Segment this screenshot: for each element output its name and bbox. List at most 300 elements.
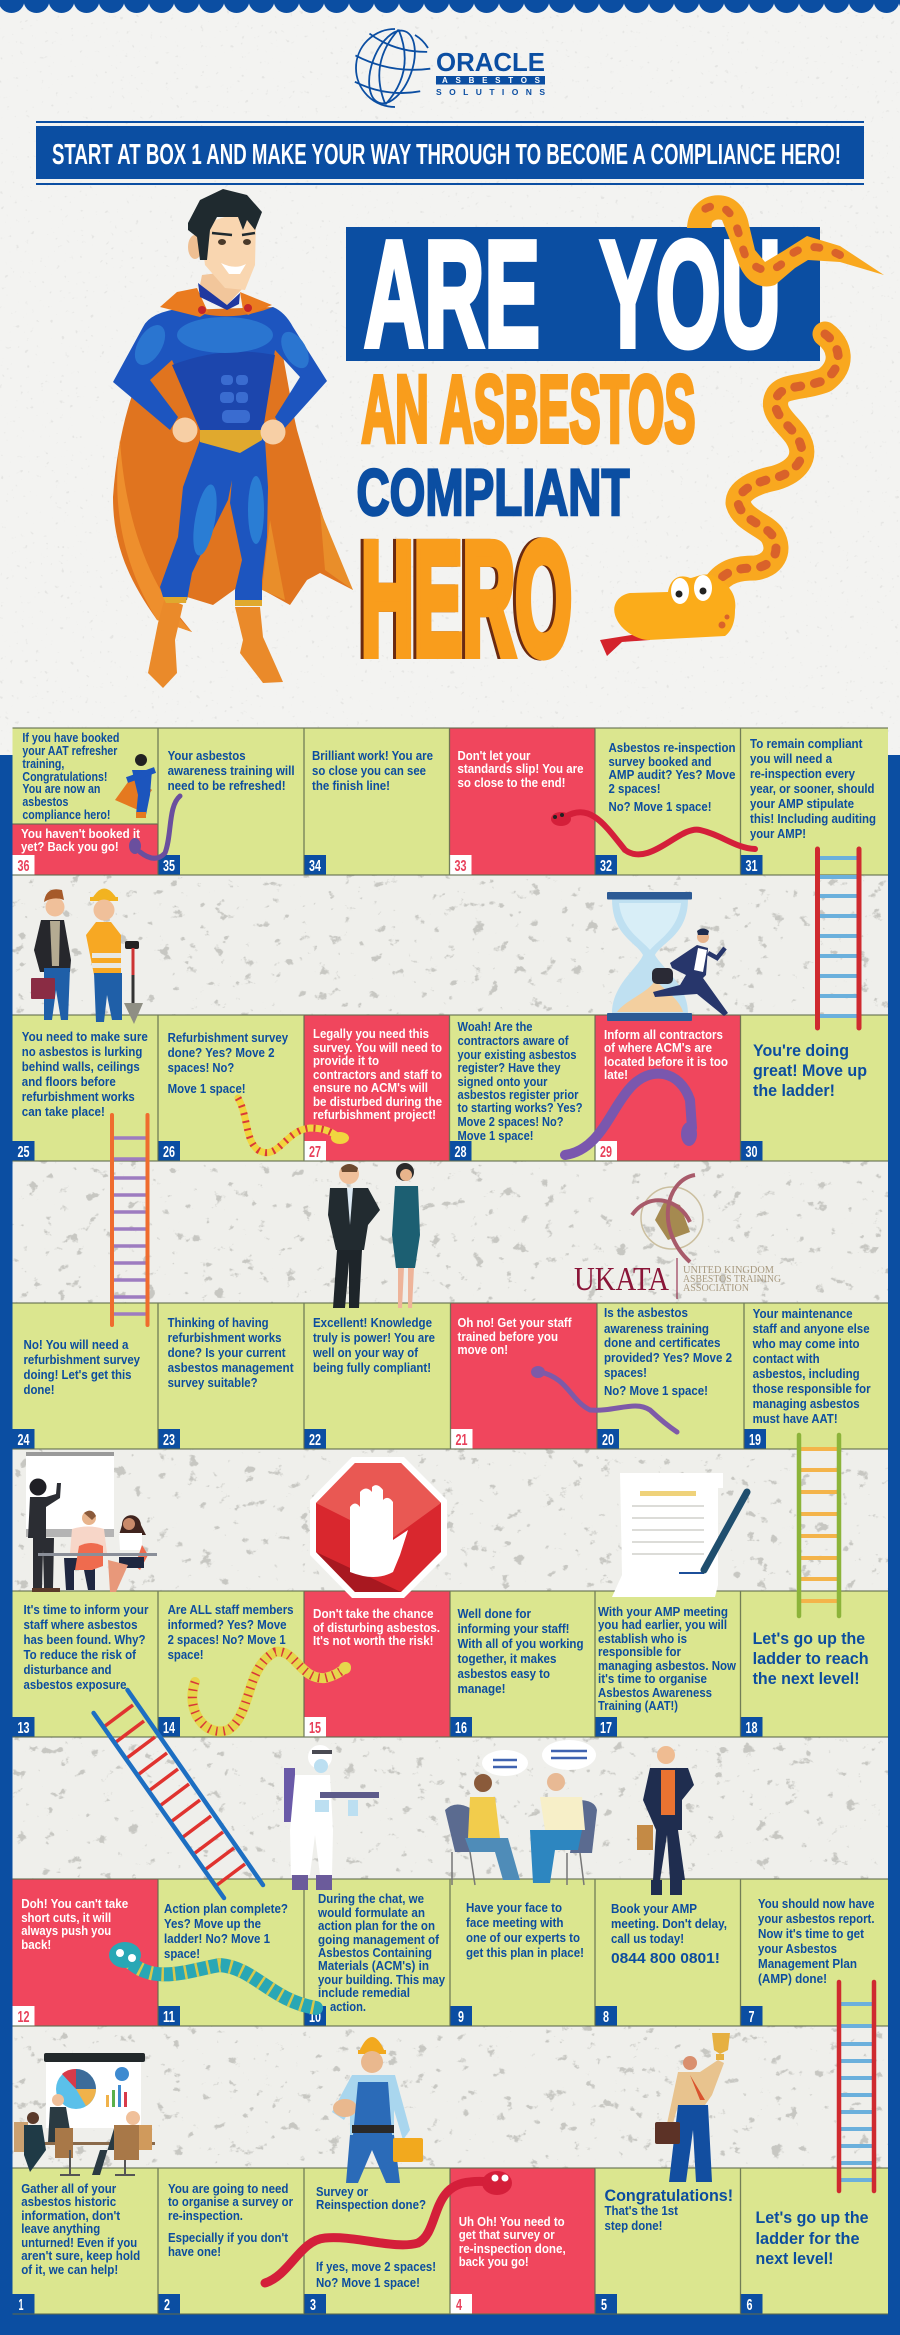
square 11 [158,1879,304,2026]
title: COMPLIANT [356,455,630,529]
grid lines [12,728,888,2314]
square 36: You are now an [22,781,100,796]
square 14: informed? Yes? Move [168,1617,287,1632]
square 14: 2 spaces! No? Move 1 [168,1632,286,1647]
square 6: next level! [756,2249,834,2268]
square 20: provided? Yes? Move 2 [604,1350,732,1365]
square 4: 4 [456,2297,462,2314]
square 36: If you have booked [22,730,119,745]
square 30: the ladder! [753,1081,835,1100]
square 23: survey suitable? [168,1375,258,1390]
square 25 [12,1015,158,1161]
square 2: You are going to need [168,2181,289,2196]
square 35: Your asbestos [168,748,246,763]
square 31: To remain compliant [750,736,863,751]
square 29: 29 [600,1144,612,1161]
snake: red square 33 [551,812,755,854]
icon: globe [348,23,436,111]
square 31: this! Including auditing [750,811,876,826]
square 13: has been found. Why? [24,1632,146,1647]
square 3: Survey or [316,2184,368,2199]
square 34 [304,728,450,875]
square 20: done and certificates [604,1335,720,1350]
logo: UKATA [574,1175,781,1299]
square 11: Action plan complete? [164,1901,288,1916]
icon: orange snake [600,195,884,656]
snake: yellow square 27 [238,1098,349,1153]
square 9: 9 [458,2009,464,2026]
square 30: 30 [746,1144,758,1161]
square 7: 7 [748,2009,755,2026]
square 8 [595,1879,740,2026]
square 20: No? Move 1 space! [604,1383,708,1398]
square 17: With your AMP meeting [598,1604,728,1619]
icon: small hero in square 36 [115,754,155,818]
snake: yellow square 15 [192,1652,351,1731]
square 13: To reduce the risk of [24,1647,137,1662]
man seated [530,1773,597,1885]
square 18: Let's go up the [753,1629,865,1648]
square 19: Your maintenance [753,1306,853,1321]
square 12: Doh! You can't take [21,1896,128,1911]
square 29 [595,1015,740,1161]
square 27: Legally you need this [313,1026,429,1041]
square 10: include remedial [318,1985,410,2000]
bar chart [106,2085,127,2107]
square 12: 12 [18,2009,30,2026]
icon: superhero [113,189,353,688]
square 27: ensure no ACM's will [313,1080,428,1095]
illustration: meeting with charts [14,2053,155,2175]
seated man [64,1511,107,1590]
illustration: tradesman with toolbox [332,2037,423,2183]
square 34: Brilliant work! You are [312,748,433,763]
square 8: call us today! [611,1931,684,1946]
square 26: 26 [163,1144,175,1161]
square 18: the next level! [753,1669,860,1688]
square 11: ladder! No? Move 1 [164,1931,270,1946]
square 34: 34 [309,858,321,875]
square 32: No? Move 1 space! [608,799,712,814]
square 5: That's the 1st [604,2203,679,2218]
square 2: 2 [164,2297,170,2314]
square 23: refurbishment works [168,1330,282,1345]
square 29: Inform all contractors [604,1027,723,1042]
square 16 [450,1591,595,1737]
square 28: contractors aware of [458,1033,569,1048]
square 25: 25 [18,1144,30,1161]
square 7 [740,1879,888,2026]
square 11: 11 [163,2009,175,2026]
illustration: two workers [31,888,143,1024]
square 31: you will need a [750,751,833,766]
square 17 [595,1591,740,1737]
square 36 [12,728,158,824]
square 14: space! [168,1647,204,1662]
square 27: refurbishment project! [313,1107,436,1122]
row: squares 1 to 6 [12,2168,888,2314]
square 20: 20 [602,1432,614,1449]
square 19: who may come into [752,1336,860,1351]
ladder: square 7 to 6 [839,1982,874,2191]
title: HERO [358,509,569,688]
square 17: you had earlier, you will [598,1617,727,1632]
icon: stop sign [310,1457,447,1598]
square 22: truly is power! You are [313,1330,435,1345]
pie chart [56,2067,129,2109]
square 19: contact with [753,1351,820,1366]
runner [652,928,728,1016]
square 6: ladder for the [756,2229,860,2248]
square 36 penalty: You haven't booked it [21,826,141,841]
square 3: If yes, move 2 spaces! [316,2259,436,2274]
square 17: 17 [600,1720,612,1737]
square 19: managing asbestos [753,1396,860,1411]
square 23: Thinking of having [168,1315,269,1330]
title: ARE [364,209,540,378]
square 9: Have your face to [466,1900,562,1915]
square 1: 1 [18,2297,24,2314]
square 21: Oh no! Get your staff [458,1315,572,1330]
illustration: couple talking [328,1163,420,1308]
man [328,1164,380,1308]
square 35: 35 [163,858,175,875]
square 2: have one! [168,2244,221,2259]
square 5: step done! [604,2218,662,2233]
square 13: disturbance and [24,1662,112,1677]
square 2 [158,2168,304,2314]
square 28: register? Have they [458,1060,561,1075]
square 33: Don't let your [458,748,530,763]
square 2: Especially if you don't [168,2230,289,2245]
woman seated [445,1774,520,1885]
snake: teal square 12 [109,1942,316,2008]
square 25: refurbishment works [22,1089,135,1104]
square 31: your AMP! [750,826,806,841]
illustration: hourglass and runner [607,892,728,1021]
scalloped top edge [0,0,900,13]
square 13: It's time to inform your [24,1602,148,1617]
square 12: short cuts, it will [21,1910,111,1925]
square 6: Let's go up the [756,2208,868,2227]
square 8: 0844 800 0801! [611,1950,720,1967]
square 32: Asbestos re-inspection [608,740,736,755]
square 26: spaces! No? [168,1060,234,1075]
square 22: 22 [309,1432,321,1449]
square 12: back! [21,1937,51,1952]
square 24 [12,1303,158,1449]
icon: UKATA globe [632,1175,703,1262]
square 33 [450,728,595,875]
square 29: of where ACM's are [604,1040,712,1055]
square 5 [595,2168,740,2314]
square 10: action. [330,1999,366,2014]
square 25: You need to make sure [22,1029,148,1044]
square 5: Congratulations! [604,2186,733,2205]
square 25: no asbestos is lurking [22,1044,142,1059]
illustration: man with trophy [655,2033,730,2182]
ladder: square 31 to 30 [818,849,859,1028]
square 21: 21 [456,1432,468,1449]
square 21 [450,1303,597,1449]
square 35: need to be refreshed! [168,778,286,793]
square 28: Woah! Are the [458,1019,532,1034]
square 24: doing! Let's get this [24,1367,132,1382]
square 29: located before it is too [604,1054,728,1069]
square 17: responsible for [598,1644,681,1659]
snake: purple square 29 [565,1074,697,1155]
logo: Oracle Asbestos Solutions: ORACLE [436,47,545,77]
seated woman [108,1515,148,1592]
square 28: asbestos register prior [458,1087,578,1102]
square 13: staff where asbestos [24,1617,138,1632]
square 10: would formulate an [317,1905,425,1920]
illustration: document and pen [612,1473,747,1597]
square 17: managing asbestos. Now [598,1658,737,1673]
square 27: 27 [309,1144,321,1161]
square 6 [740,2168,888,2314]
square 9: get this plan in place! [466,1945,584,1960]
square 28: your existing asbestos [458,1047,576,1062]
square 10: During the chat, we [318,1891,424,1906]
square 26: done? Yes? Move 2 [168,1045,275,1060]
seated colleagues [14,2094,152,2175]
square 33: standards slip! You are [458,761,584,776]
square 1: information, don't [21,2208,121,2223]
paper background [0,0,900,755]
square 15: It's not worth the risk! [313,1633,434,1648]
square 28: Move 1 space! [458,1128,534,1143]
square 30: You're doing [753,1041,849,1060]
square 25: behind walls, ceilings [22,1059,140,1074]
square 23: 23 [163,1432,175,1449]
logo: UKATA: UKATA [574,1261,669,1298]
square 4: get that survey or [459,2227,555,2242]
square 18 [740,1591,888,1737]
logo: UKATA: ASSOCIATION [683,1283,749,1294]
square 9: face meeting with [466,1915,564,1930]
square 16: together, it makes [458,1651,556,1666]
square 28 [450,1015,595,1161]
square 3: No? Move 1 space! [316,2275,420,2290]
square 22: Excellent! Knowledge [313,1315,432,1330]
square 27: provide it to [313,1053,379,1068]
square 25: can take place! [22,1104,105,1119]
square 29: late! [604,1067,628,1082]
square 32: AMP audit? Yes? Move [608,767,736,782]
square 1: of it, we can help! [21,2262,118,2277]
square 21: trained before you [458,1329,558,1344]
square 30 [740,1015,888,1161]
ladder: square 13 to 11 [94,1690,263,1898]
ladder: square 25 to 24 [112,1115,148,1325]
illustration: two people in conversation [445,1740,597,1885]
square 7: You should now have [758,1896,874,1911]
snake: purple square 36 [129,796,180,858]
square 13: asbestos exposure [24,1677,126,1692]
square 1: Gather all of your [21,2181,116,2196]
square 12 [12,1879,158,2026]
square 12: always push you [21,1923,111,1938]
square 36: Congratulations! [22,769,107,784]
square 11: Yes? Move up the [164,1916,261,1931]
square 22: being fully compliant! [313,1360,431,1375]
square 19: those responsible for [753,1381,871,1396]
square 33: so close to the end! [458,775,566,790]
square 26 [158,1015,304,1161]
square 22 [304,1303,450,1449]
square 21: move on! [458,1342,508,1357]
square 23: asbestos management [168,1360,294,1375]
square 1 [12,2168,158,2314]
square 22: well on your way of [312,1345,419,1360]
snake: purple square 21 [531,1366,677,1432]
board bands [12,875,888,2168]
builder [86,888,143,1024]
square 31: year, or sooner, should [750,781,875,796]
square 1: asbestos historic [21,2194,116,2209]
square 17: Training (AAT!) [598,1698,678,1713]
square 19: staff and anyone else [753,1321,870,1336]
square 26: Refurbishment survey [168,1030,289,1045]
square 19: asbestos, including [753,1366,860,1381]
square 16: Well done for [458,1606,531,1621]
square 36: compliance hero! [22,807,110,822]
logo: UKATA: ASBESTOS TRAINING [683,1274,781,1285]
square 30: great! Move up [753,1061,867,1080]
row: squares 24 to 19 [12,1303,888,1449]
square 16: With all of you working [458,1636,584,1651]
square 5: 5 [601,2297,607,2314]
square 34: the finish line! [312,778,390,793]
square 28: signed onto your [458,1074,548,1089]
square 13: 13 [18,1720,30,1737]
snake head [600,575,735,656]
square 19 [744,1303,888,1449]
square 17: Asbestos Awareness [598,1685,712,1700]
square 36: asbestos [22,794,68,809]
businessman [31,889,71,1020]
square 17: it's time to organise [598,1671,707,1686]
illustration: asbestos removal operative [284,1745,379,1890]
square 23: done? Is your current [168,1345,286,1360]
square 14 [158,1591,304,1737]
square 8: meeting. Don't delay, [611,1916,727,1931]
title: HERO [361,509,572,688]
square 11: space! [164,1946,200,1961]
square 20: awareness training [604,1321,709,1336]
square 10: going management of [318,1932,440,1947]
presenter [28,1478,61,1592]
row: squares 25 to 30 [12,1015,888,1161]
square 4: Uh Oh! You need to [459,2214,565,2229]
square 28: Move 2 spaces! No? [458,1114,564,1129]
square 25: and floors before [22,1074,116,1089]
square 8: 8 [603,2009,609,2026]
square 7: Now it's time to get [758,1926,865,1941]
square 1: unturned! Even if you [21,2235,137,2250]
square 32: 32 [600,858,612,875]
square 1: leave anything [21,2221,100,2236]
square 19: 19 [749,1432,761,1449]
logo: Oracle Asbestos Solutions [348,23,545,111]
square 32 [595,728,740,875]
square 16: 16 [455,1720,467,1737]
logo: Oracle Asbestos Solutions: SOLUTIONS [436,87,545,97]
square 19: must have AAT! [753,1411,838,1426]
square 2: to organise a survey or [168,2194,293,2209]
square 7: your Asbestos [758,1941,837,1956]
illustration: man on phone [637,1746,694,1895]
square 20: spaces! [604,1365,647,1380]
square 10: 10 [309,2009,321,2026]
ladder: square 19 to 18 [799,1435,839,1616]
square 31: re-inspection every [750,766,856,781]
square 4: back you go! [459,2254,529,2269]
square 18: ladder to reach [753,1649,869,1668]
square 24: 24 [18,1432,30,1449]
square 9: one of our experts to [466,1930,580,1945]
square 14: 14 [163,1720,175,1737]
square 36: your AAT refresher [22,743,117,758]
square 26: Move 1 space! [168,1081,246,1096]
square 32: survey booked and [608,754,712,769]
square 7: your asbestos report. [758,1911,874,1926]
square 32: 2 spaces! [608,781,660,796]
snake body [715,334,838,585]
logo: UKATA: UNITED KINGDOM [683,1265,775,1276]
row: squares 36 to 31 [12,728,888,875]
square 34: so close you can see [312,763,426,778]
square 27: be disturbed during the [313,1094,442,1109]
square 23 [158,1303,304,1449]
square 4 [450,2168,595,2314]
square 1: aren't sure, keep hold [21,2248,140,2263]
square 24: No! You will need a [24,1337,129,1352]
blue board background [0,755,900,2335]
square 15 [304,1591,450,1737]
square 10 [304,1879,450,2026]
square 15: of disturbing asbestos. [313,1620,440,1635]
square 20: Is the asbestos [604,1305,688,1320]
square 27: survey. You will need to [313,1040,442,1055]
snake: red square 4 [265,2171,512,2283]
square 7: (AMP) done! [758,1971,827,1986]
square 33: 33 [454,858,467,875]
square 27 [304,1015,450,1161]
square 10: Asbestos Containing [318,1945,432,1960]
square 24: done! [24,1382,54,1397]
title [346,209,820,688]
square 35 [158,728,304,875]
square 20 [597,1303,744,1449]
illustration: presentation at whiteboard [26,1452,157,1592]
square 10: your building. This may [318,1972,446,1987]
square 31: 31 [746,858,758,875]
square 15: 15 [309,1720,321,1737]
square 9 [450,1879,595,2026]
square 8: Book your AMP [611,1901,697,1916]
square 31 [740,728,888,875]
square 16: asbestos easy to [458,1666,550,1681]
square 36 penalty: yet? Back you go! [21,839,119,854]
square 36 penalty [12,824,158,875]
square 31: your AMP stipulate [750,796,854,811]
square 16: informing your staff! [458,1621,570,1636]
square 17: establish who is [598,1631,687,1646]
square 35: awareness training will [168,763,295,778]
square 10: action plan for the on [318,1918,435,1933]
